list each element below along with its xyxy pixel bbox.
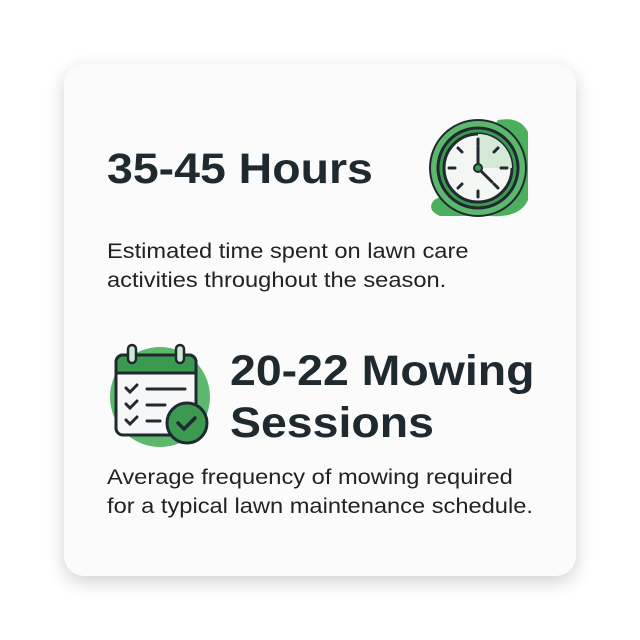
body text: hours — [107, 239, 469, 292]
heading: 20-22 Mowing Sessions: Sessions — [230, 399, 434, 447]
body text: hours: Estimated time spent on lawn care — [107, 239, 469, 263]
body text: mowing: for a typical lawn maintenance schedule. — [107, 494, 533, 518]
card — [64, 64, 576, 576]
body text: mowing: Average frequency of mowing required — [107, 465, 513, 489]
icon: clock — [429, 119, 528, 217]
heading: 20-22 Mowing Sessions: 20-22 Mowing — [230, 347, 534, 395]
body text: mowing — [107, 465, 533, 518]
heading: 20-22 Mowing Sessions — [230, 347, 534, 447]
heading: 35-45 Hours: 35-45 Hours — [107, 145, 373, 193]
icon: calendar — [110, 344, 210, 447]
body text: hours: activities throughout the season. — [107, 268, 446, 292]
